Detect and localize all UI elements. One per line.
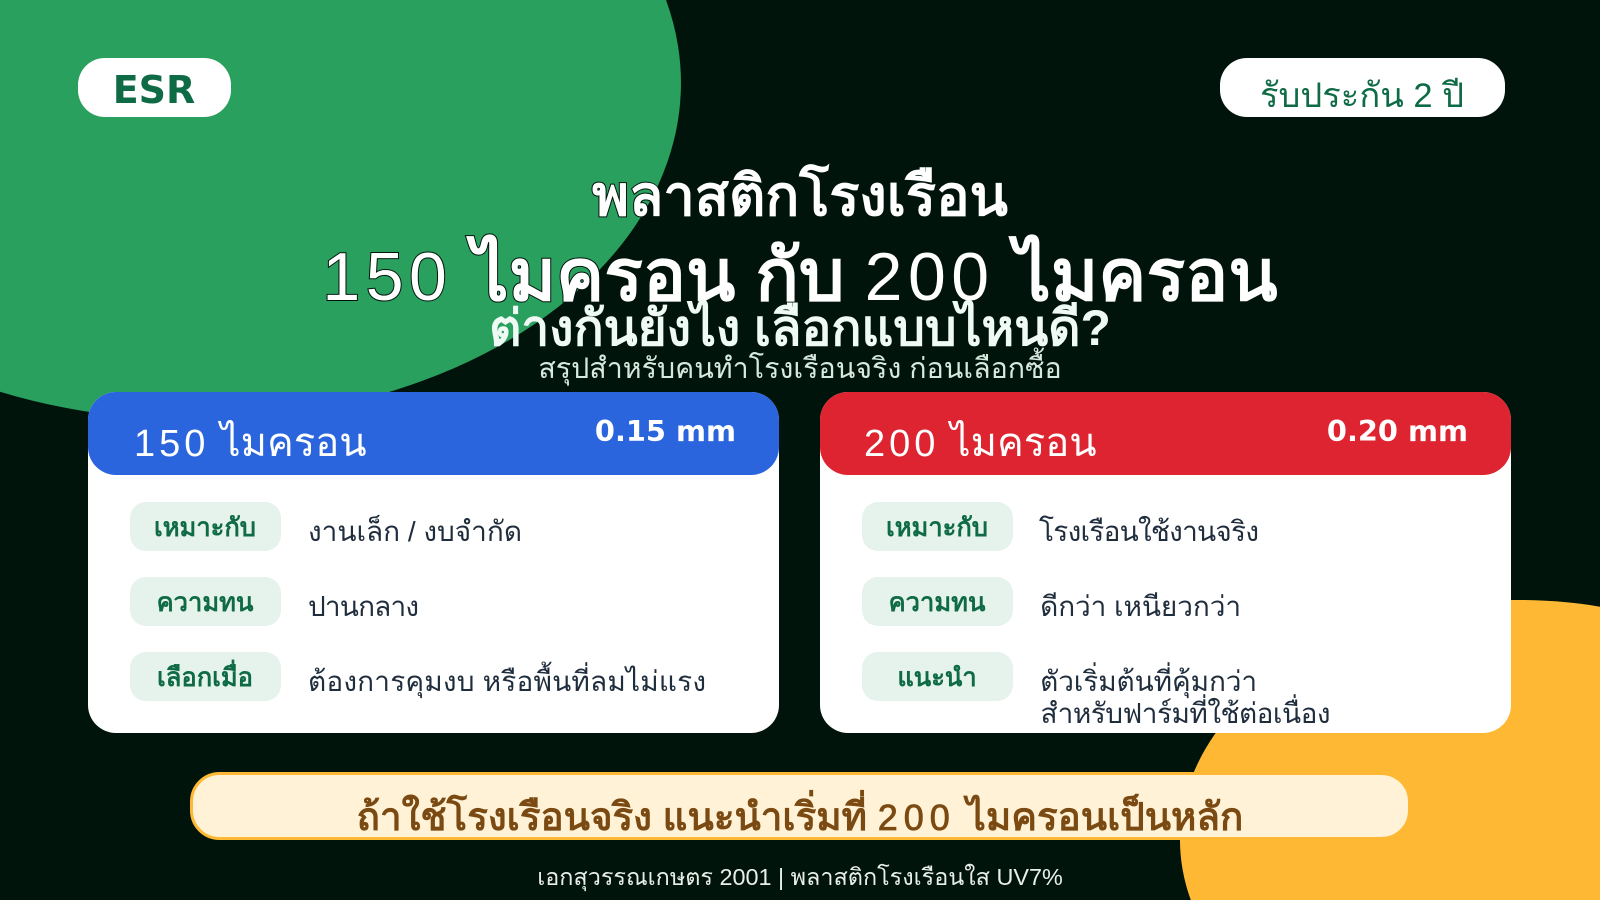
row: durability: ดีกว่า เหนียวกว่า — [1040, 591, 1241, 622]
background green blob — [0, 0, 681, 420]
brand badge: ESR: ESR — [113, 68, 195, 112]
row: durability: ความทน — [157, 589, 254, 617]
panel header: 150 micron: 150 ไมครอน — [134, 420, 367, 465]
panel: 200 micron — [820, 392, 1511, 733]
row: recommendation: แนะนำ — [897, 664, 977, 692]
warranty badge — [1220, 58, 1505, 117]
row: recommendation — [862, 652, 1331, 729]
brand badge: ESR — [78, 58, 231, 117]
panel header: 200 micron: 200 ไมครอน — [864, 420, 1097, 465]
subtitle: สรุปสำหรับคนทำโรงเรือนจริง ก่อนเลือกซื้อ — [538, 348, 1062, 386]
callout: recommendation: ถ้าใช้โรงเรือนจริง แนะนำเริ่มที่ 200 ไมครอนเป็นหลัก — [357, 790, 1243, 839]
footer: เอกสุวรรณเกษตร 2001 | พลาสติกโรงเรือนใส UV7% — [537, 864, 1063, 891]
row: choose when: เลือกเมื่อ — [157, 659, 253, 692]
panel header: 200 micron: 0.20 mm — [1327, 414, 1468, 448]
title block — [322, 163, 1278, 386]
row: durability — [862, 577, 1241, 626]
row: suitable for — [130, 502, 522, 551]
panel header: 200 micron — [820, 392, 1511, 475]
row: suitable for: งานเล็ก / งบจำกัด — [308, 514, 522, 547]
callout: recommendation — [192, 774, 1410, 839]
row: recommendation: ตัวเริ่มต้นที่คุ้มกว่า — [1040, 662, 1257, 699]
row: durability: ความทน — [889, 589, 986, 617]
row: durability — [130, 577, 419, 626]
title line 2: 150 ไมครอน กับ 200 ไมครอน — [322, 233, 1278, 316]
title line 3: ต่างกันยังไง เลือกแบบไหนดี? — [489, 299, 1111, 356]
row: suitable for — [862, 502, 1259, 551]
background orange blob — [1180, 600, 1600, 900]
row: choose when — [130, 652, 706, 701]
row: suitable for: เหมาะกับ — [886, 514, 988, 542]
row: choose when: ต้องการคุมงบ หรือพื้นที่ลมไม่แรง — [308, 661, 706, 699]
title line 1: พลาสติกโรงเรือน — [592, 163, 1008, 227]
panel header: 150 micron — [88, 392, 779, 475]
panel header: 150 micron: 0.15 mm — [595, 414, 736, 448]
row: suitable for: เหมาะกับ — [154, 514, 256, 542]
row: durability: ปานกลาง — [308, 591, 419, 622]
panel: 150 micron — [88, 392, 779, 733]
row: suitable for: โรงเรือนใช้งานจริง — [1039, 515, 1259, 547]
row: recommendation: สำหรับฟาร์มที่ใช้ต่อเนื่อง — [1041, 694, 1331, 729]
warranty badge: รับประกัน 2 ปี — [1260, 77, 1464, 115]
